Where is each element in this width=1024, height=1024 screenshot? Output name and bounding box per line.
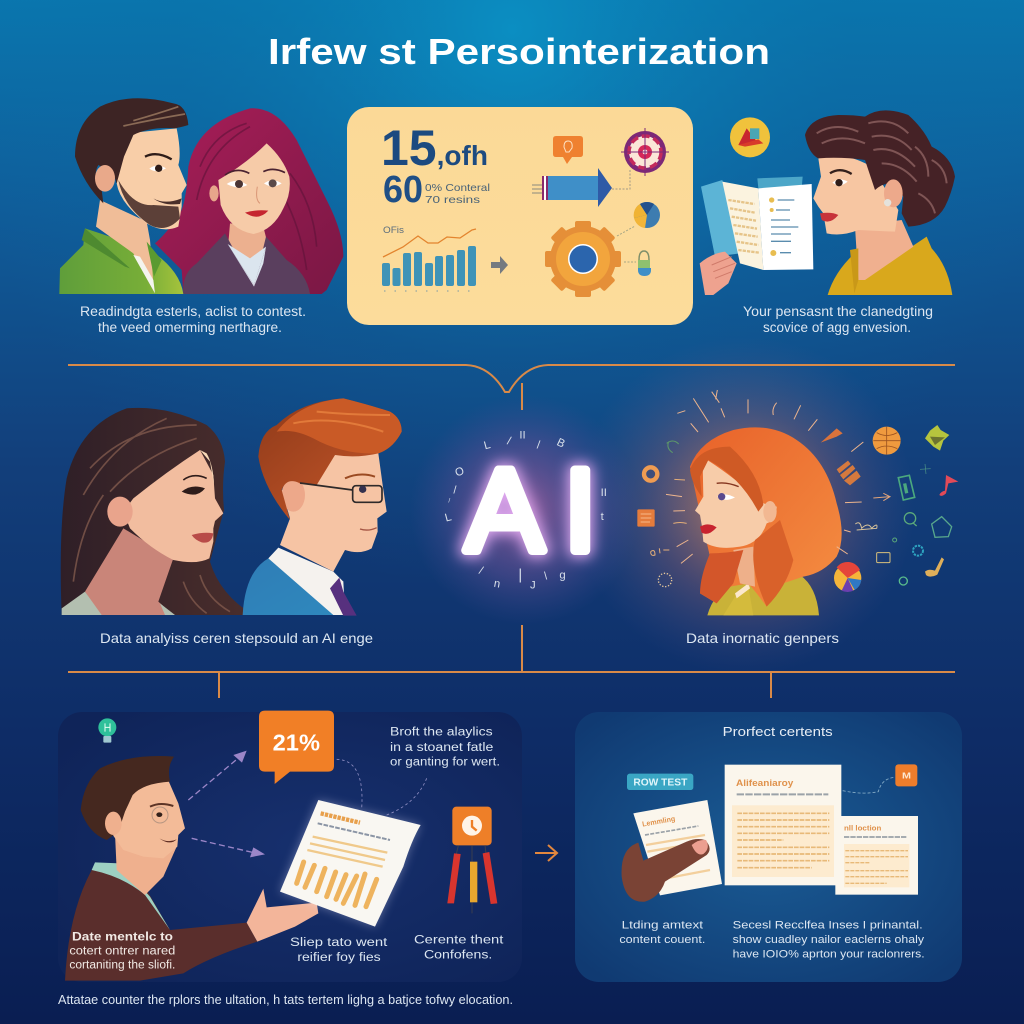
radial glyph ticks around AI: / xyxy=(453,484,457,496)
arrowheads xyxy=(233,751,265,857)
caption: data analysis: Data analyiss ceren stepsould an AI enge xyxy=(100,630,373,646)
text: top right note xyxy=(390,724,500,769)
icon: badge xyxy=(730,117,770,157)
text: right note: Confofens. xyxy=(424,948,492,962)
caption: top right xyxy=(743,304,933,335)
icon: grey arrow xyxy=(491,256,508,274)
radial glyph ticks around AI: g xyxy=(559,570,566,582)
text: top right note: or ganting for wert. xyxy=(390,755,500,769)
caption: left: content couent. xyxy=(619,934,705,946)
title: Irfew st Persointerization xyxy=(268,31,770,72)
AI logo with glow xyxy=(444,429,607,591)
caption: right: have IOIO% aprton your raclonrers. xyxy=(733,948,925,960)
small document xyxy=(835,816,918,895)
badge: row test: ROW TEST xyxy=(633,778,687,789)
footer note: Attatae counter the rplors the ultation, h tats tertem lighg a batjce tofwy elocation. xyxy=(58,993,513,1007)
AI logo with glow: AI xyxy=(466,444,597,576)
text: centre note xyxy=(290,935,388,964)
caption: top left: Readindgta esterls, aclist to contest. xyxy=(80,304,306,319)
radial glyph ticks around AI: B xyxy=(555,437,567,451)
stat: 60 xyxy=(383,169,490,211)
icon: clock xyxy=(452,807,492,845)
icon: pie xyxy=(634,202,660,228)
callout: 21%: 21% xyxy=(273,730,320,756)
radial glyph ticks around AI: J xyxy=(530,579,536,591)
icon: light bulb xyxy=(98,718,116,743)
icon: three pencils xyxy=(447,845,497,913)
illustration: woman reading document, top right xyxy=(700,110,955,295)
radial glyph ticks around AI: / xyxy=(448,498,450,505)
caption: top left xyxy=(80,304,306,335)
icon: blue arrow xyxy=(532,168,630,207)
caption: left: Ltding amtext xyxy=(622,920,703,932)
illustration: man and woman, top left xyxy=(59,98,343,294)
man xyxy=(59,98,188,294)
divider: lower connector lines xyxy=(68,625,955,698)
icon: target xyxy=(621,128,669,176)
caption: left xyxy=(619,920,705,946)
radial glyph ticks around AI xyxy=(444,429,607,591)
caption: top left: the veed omerming nerthagre. xyxy=(98,320,282,335)
radial glyph ticks around AI: II xyxy=(601,487,607,499)
radial glyph ticks around AI: n xyxy=(493,578,501,591)
hand xyxy=(622,839,710,902)
dashed connectors xyxy=(337,759,427,815)
panel: central data card xyxy=(347,107,693,325)
small card held by hand: Lemmling xyxy=(641,814,676,829)
text: right note xyxy=(414,933,504,962)
text: right note: Cerente thent xyxy=(414,933,504,947)
woman with magenta hair xyxy=(155,108,343,294)
callout: 21% xyxy=(259,711,334,784)
caption: top right: scovice of agg envesion. xyxy=(763,320,911,335)
caption: right: Secesl Recclfea Inses I prinantal. xyxy=(733,920,923,932)
radial glyph ticks around AI: L xyxy=(444,511,453,525)
caption: right: show cuadley nailor eaclerns ohaly xyxy=(733,934,925,946)
text: lower left note xyxy=(69,930,175,971)
illustration: man with ginger hair and glasses xyxy=(243,398,402,616)
text: centre note: reifier foy fies xyxy=(297,950,381,964)
AI logo with glow: AI xyxy=(466,444,597,576)
radial glyph ticks around AI: / xyxy=(477,565,485,578)
icon: orange tag xyxy=(843,764,917,793)
large document: Alifeaniaroy xyxy=(736,778,793,788)
radial glyph ticks around AI: \ xyxy=(544,570,548,582)
text: top right note: in a stoanet fatle xyxy=(390,740,494,754)
creative icons xyxy=(637,390,958,592)
stat: 60: 60 xyxy=(383,169,423,211)
radial glyph ticks around AI: / xyxy=(536,439,541,452)
large document xyxy=(725,765,841,885)
illustration: woman with brown hair xyxy=(61,408,253,615)
icon: orange speech bubble xyxy=(553,136,583,164)
stat: 15,ofh: 15,ofh xyxy=(381,120,488,176)
text: lower left note: cortaniting the sliofi. xyxy=(69,957,175,971)
small document: nll loction xyxy=(844,824,882,833)
radial glyph ticks around AI: | xyxy=(518,567,522,583)
caption: right xyxy=(733,920,925,960)
woman xyxy=(805,110,955,295)
man pointing xyxy=(65,756,318,981)
bar and line chart xyxy=(382,225,476,291)
icon: gear xyxy=(545,221,636,297)
icon: lock xyxy=(638,251,651,276)
illustration: woman with orange hair and creative icons xyxy=(637,390,958,615)
radial glyph ticks around AI: O xyxy=(454,465,466,479)
stat: 60: 0% Conteral xyxy=(425,182,490,194)
text: top right note: Broft the alaylics xyxy=(390,724,493,738)
small card held by hand xyxy=(622,800,722,902)
panel heading: Prorfect certents xyxy=(723,725,833,739)
radial glyph ticks around AI: II xyxy=(519,429,526,441)
panel: left analysis panel xyxy=(58,711,522,982)
panel: right content panel xyxy=(575,712,962,982)
woman xyxy=(690,427,842,615)
icon: arrow between panels xyxy=(535,845,557,861)
text: lower left note: cotert ontrer nared xyxy=(69,944,175,958)
radial glyph ticks around AI: t xyxy=(601,511,605,523)
radial glyph ticks around AI: L xyxy=(483,439,492,452)
badge: row test xyxy=(627,774,693,790)
caption: data informatic: Data inornatic genpers xyxy=(686,630,839,646)
document xyxy=(280,800,421,927)
icon: orange tag: M xyxy=(902,771,911,781)
radial glyph ticks around AI: / xyxy=(506,435,513,448)
dashed arrows xyxy=(188,757,257,853)
stat: 60: 70 resins xyxy=(425,194,480,206)
text: lower left note: Date mentelc to xyxy=(72,930,173,944)
bar and line chart: OFis xyxy=(383,225,404,236)
divider: top connector line xyxy=(68,365,955,410)
document xyxy=(700,177,813,295)
caption: top right: Your pensasnt the clanedgting xyxy=(743,304,933,319)
text: centre note: Sliep tato went xyxy=(290,935,388,949)
